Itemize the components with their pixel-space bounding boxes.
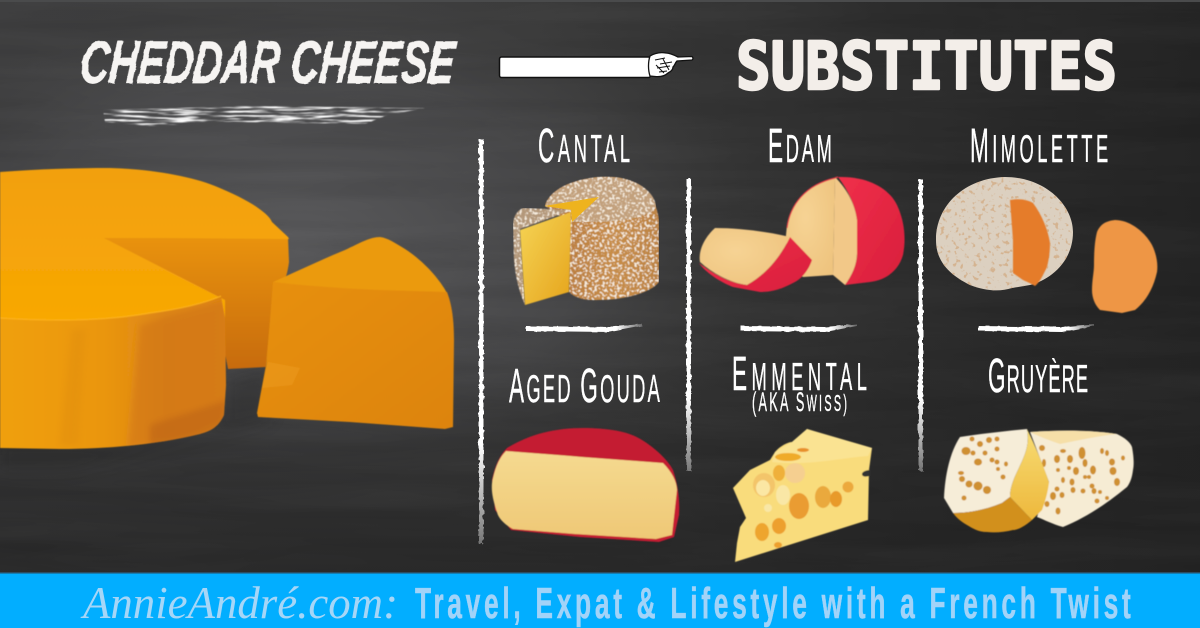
- chalk row divider: Cantal: [526, 324, 642, 332]
- footer banner: [0, 572, 1200, 628]
- heading: Substitutes: SUBSTITUTES: [736, 28, 1117, 105]
- banner tagline: Travel, Expat & Lifestyle with a French Twist: [415, 578, 1131, 628]
- chalk underline under heading: [103, 106, 425, 126]
- cheddar front side: [0, 290, 230, 455]
- chalk column divider 1: [479, 139, 484, 544]
- cheese photo: Mimolette: [936, 177, 1157, 313]
- label: Edam: EDAM: [768, 118, 832, 172]
- label: Gruyère: GRUYÈRE: [988, 348, 1088, 402]
- banner script: AnnieAndré.com: AnnieAndré.com:: [80, 577, 398, 628]
- label: Mimolette: MIMOLETTE: [970, 118, 1108, 172]
- cheese photo: Cantal: [513, 177, 659, 305]
- cheddar back wall: [100, 236, 289, 369]
- heading: Cheddar Cheese: CHEDDAR CHEESE: [78, 29, 459, 96]
- cheese photo: Gruyère: [944, 429, 1134, 532]
- cheese photo: Edam: [699, 177, 905, 292]
- cheese photo: cheddar wedge: [257, 237, 454, 429]
- label: Aged Gouda: AGED GOUDA: [509, 358, 660, 412]
- chalk column divider 2: [686, 179, 691, 471]
- chalk row divider: Mimolette: [978, 324, 1094, 332]
- chalk row divider: Edam: [741, 324, 857, 332]
- arrow: pointing hand with white bar: [500, 53, 693, 78]
- label: Cantal: CANTAL: [538, 118, 630, 172]
- chalk column divider 3: [918, 179, 923, 471]
- label: Emmental (aka Swiss): (AKA SWISS): [752, 388, 847, 417]
- Mimolette slice: [1092, 220, 1157, 313]
- cheese photo: Emmental: [733, 429, 872, 562]
- cheddar top surface: [0, 168, 289, 335]
- label: Emmental (aka Swiss): EMMENTAL: [732, 346, 867, 400]
- cheese photo: cheddar wheel: [0, 168, 289, 470]
- cheese photo: Aged Gouda: [492, 428, 679, 542]
